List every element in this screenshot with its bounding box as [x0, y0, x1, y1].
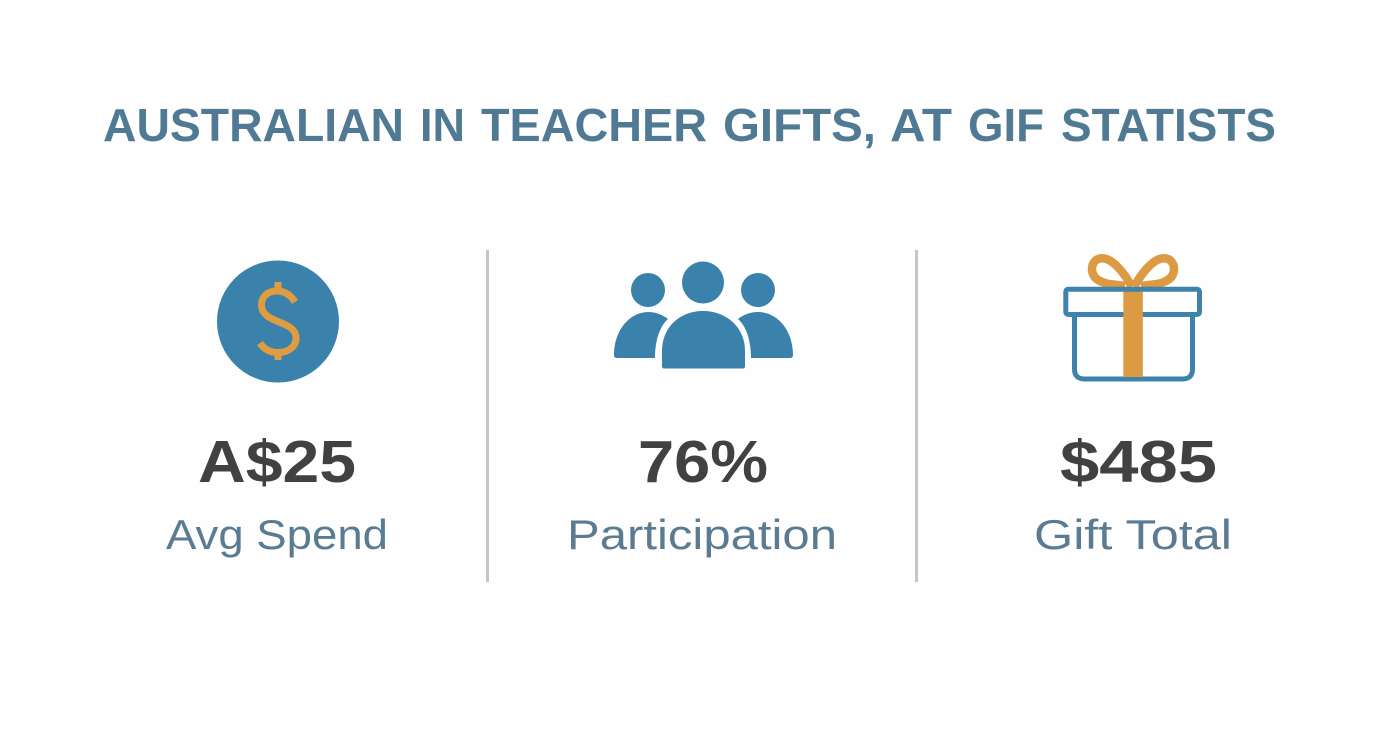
title: AT [890, 99, 952, 151]
icon: group of people [614, 262, 793, 368]
title: GIF [968, 99, 1044, 151]
title: IN [420, 99, 465, 151]
icon: dollar coin [217, 260, 339, 382]
stat: 76%: 76% [638, 429, 768, 495]
title: AUSTRALIAN [103, 99, 404, 151]
title: GIFTS, [723, 99, 876, 151]
stat: $485: $485 [1060, 429, 1217, 495]
icon: gift box [1066, 258, 1200, 379]
label: Avg Spend: Avg Spend [166, 511, 388, 558]
title: TEACHER [481, 99, 707, 151]
label: Gift Total: Gift Total [1034, 511, 1232, 558]
panel: average spend [166, 260, 388, 558]
title: STATISTS [1061, 99, 1276, 151]
panel: gift total [1034, 258, 1232, 558]
label: Participation: Participation [567, 511, 837, 558]
panel: participation [567, 262, 837, 558]
stat: A$25: A$25 [198, 429, 356, 495]
